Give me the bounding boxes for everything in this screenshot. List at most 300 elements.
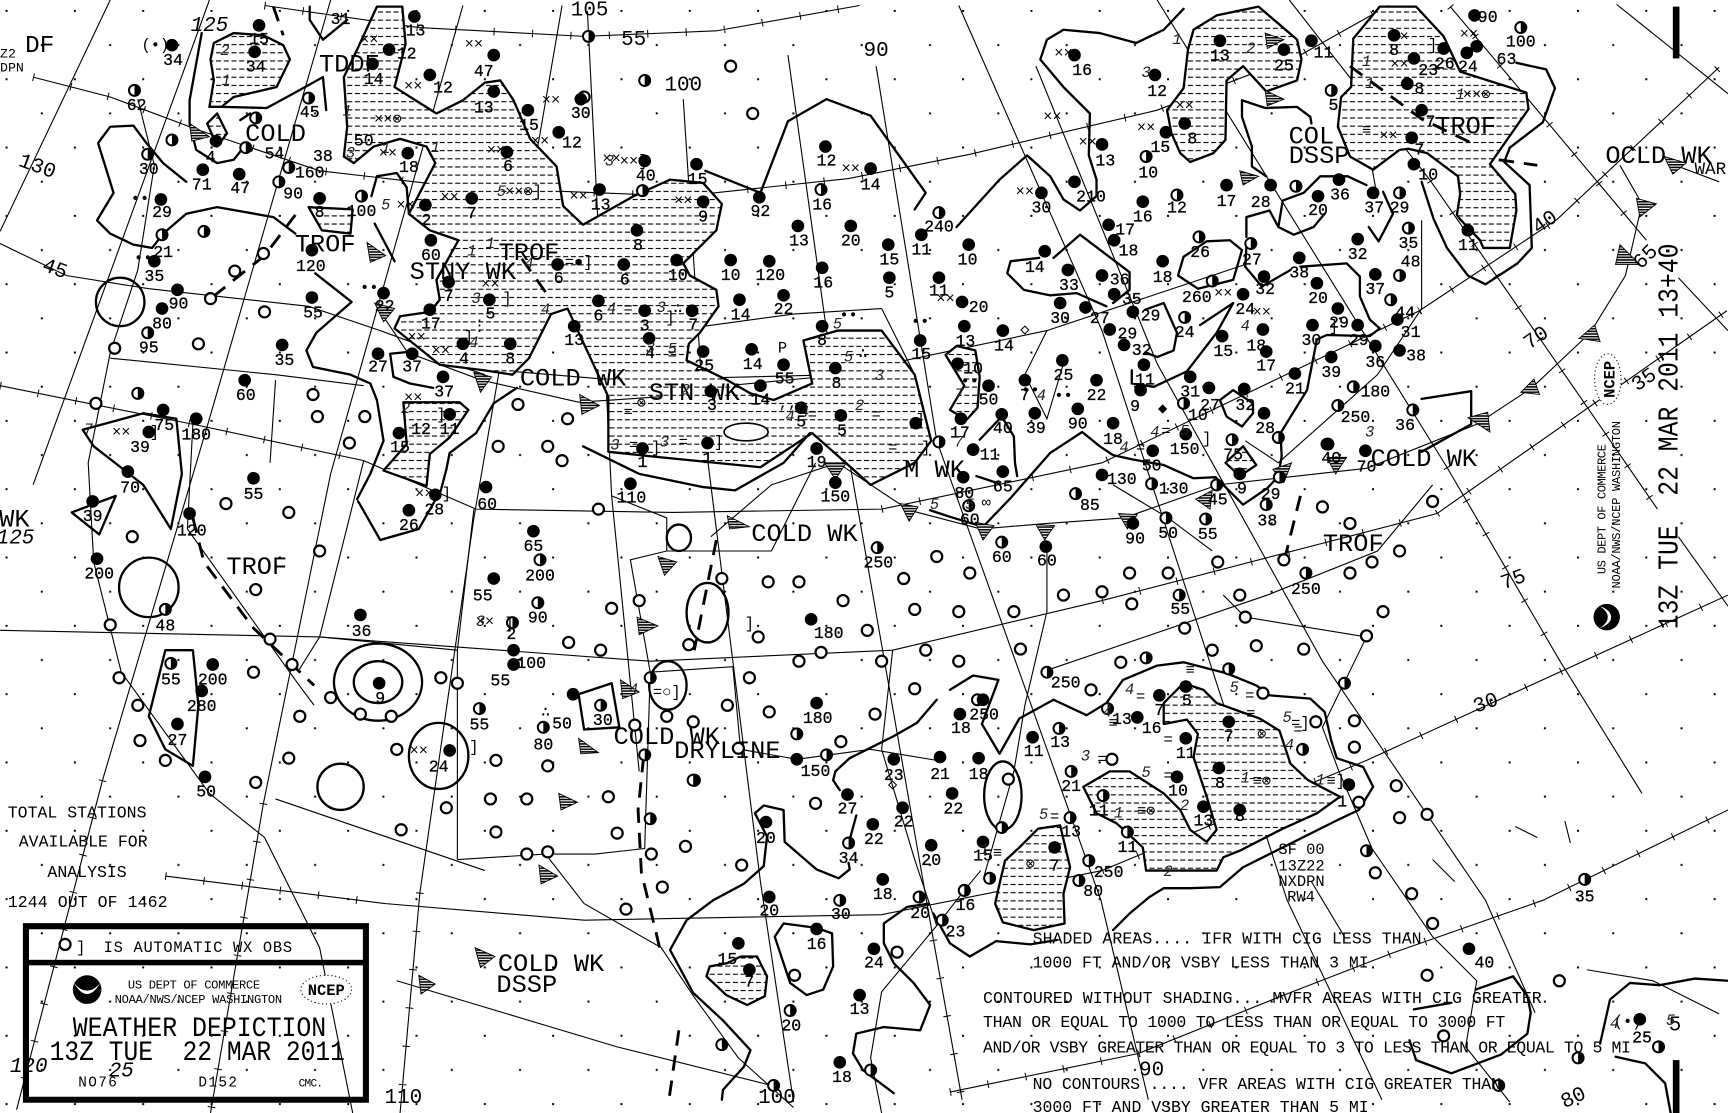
present weather and visibility symbols: ◇ xyxy=(888,776,898,794)
station values: 180 xyxy=(814,624,844,643)
present weather and visibility symbols: ×× xyxy=(1390,28,1409,46)
station values: 16 xyxy=(813,274,833,293)
station values: 50 xyxy=(1158,524,1178,543)
station values: 14 xyxy=(1025,258,1045,277)
present weather and visibility symbols: ≡ xyxy=(1246,705,1255,723)
station values: 25 xyxy=(694,356,714,375)
rotated NCEP badge: NCEP xyxy=(1601,361,1619,398)
product codes: NO76 xyxy=(78,1076,117,1092)
station values: 18 xyxy=(1103,430,1123,449)
prefixed visibility values: 4 xyxy=(541,301,550,319)
station values: 35 xyxy=(1398,234,1418,253)
station values: 47 xyxy=(230,179,250,198)
station values: 39 xyxy=(130,438,150,457)
station values: 7 xyxy=(467,204,477,223)
station values: 21 xyxy=(1061,777,1081,796)
chart identifiers: RW4 xyxy=(1287,888,1315,906)
station values: 160 xyxy=(295,163,325,182)
station values: 9 xyxy=(1237,480,1247,499)
prefixed visibility values: 5 xyxy=(1141,764,1151,782)
station values: 17 xyxy=(950,423,970,442)
station values: 15 xyxy=(879,250,899,269)
station values: 5 xyxy=(884,284,894,303)
present weather and visibility symbols: ] xyxy=(651,439,660,457)
prefixed visibility values: 4 xyxy=(1610,1015,1619,1033)
station values: 16 xyxy=(955,896,975,915)
station values: 10 xyxy=(1188,406,1208,425)
station values: 13 xyxy=(955,332,975,351)
IFR shaded areas xyxy=(207,7,1528,1005)
station values: 30 xyxy=(571,104,591,123)
agency lines: NOAA/NWS/NCEP WASHINGTON xyxy=(115,993,282,1007)
present weather and visibility symbols: ≡ xyxy=(993,844,1002,862)
title box xyxy=(26,926,366,1100)
grid value labels: 105 xyxy=(571,0,608,22)
station values: 16 xyxy=(1142,719,1162,738)
station values: 13 xyxy=(1050,733,1070,752)
station values: 10 xyxy=(668,266,688,285)
station values: 60 xyxy=(1037,551,1057,570)
present weather and visibility symbols: ××⊗ xyxy=(1463,86,1491,104)
present weather and visibility symbols: = xyxy=(1136,439,1145,457)
present weather and visibility symbols: =○] xyxy=(653,683,681,701)
present weather and visibility symbols: ≡ xyxy=(1186,661,1195,679)
station values: 6 xyxy=(620,270,630,289)
prefixed visibility values: 7 xyxy=(954,386,964,404)
station values: 20 xyxy=(1308,289,1328,308)
prefixed visibility values: 1 xyxy=(486,235,495,253)
present weather and visibility symbols: ×× xyxy=(487,141,505,159)
prefixed visibility values: 4 xyxy=(1037,387,1046,405)
station values: 14 xyxy=(994,336,1014,355)
present weather and visibility symbols: ×× xyxy=(440,189,459,207)
product codes: CMC. xyxy=(299,1079,323,1091)
station values: 54 xyxy=(265,145,284,164)
present weather and visibility symbols: ××⊗] xyxy=(505,183,542,201)
station values: 47 xyxy=(474,62,494,81)
station values: 150 xyxy=(801,762,830,781)
present weather and visibility symbols: ] xyxy=(505,615,514,633)
station values: 36 xyxy=(352,622,371,641)
prefixed visibility values: 5 xyxy=(965,496,974,514)
station values: 16 xyxy=(1072,61,1092,80)
station values: 30 xyxy=(831,905,851,924)
station values: 65 xyxy=(523,537,543,556)
chart identifiers: Z2 xyxy=(0,46,16,61)
prefixed visibility values: 1 xyxy=(1241,769,1250,787)
present weather and visibility symbols: ,, xyxy=(779,395,797,413)
station values: 32 xyxy=(1235,396,1255,415)
station values: 250 xyxy=(1051,674,1081,693)
prefixed visibility values: 1 xyxy=(1456,86,1465,104)
prefixed visibility values: 3 xyxy=(476,613,485,631)
present weather and visibility symbols: = xyxy=(1294,721,1303,739)
present weather and visibility symbols: ×× xyxy=(1253,303,1271,321)
station values: 45 xyxy=(1208,491,1228,510)
station values: 15 xyxy=(1151,138,1170,157)
station values: 95 xyxy=(139,339,159,358)
station values: 8 xyxy=(817,331,827,350)
agency lines: US DEPT OF COMMERCE xyxy=(128,978,260,992)
station values: 7 xyxy=(1020,386,1030,405)
station values: 13 xyxy=(1112,710,1132,729)
station values: 12 xyxy=(562,134,582,153)
station values: 26 xyxy=(1190,243,1210,262)
station values: 130 xyxy=(1107,470,1137,489)
prefixed visibility values: 4 xyxy=(800,404,809,422)
station values: 27 xyxy=(1090,309,1110,328)
present weather and visibility symbols: •• xyxy=(360,279,378,297)
station values: 8 xyxy=(315,203,325,222)
present weather and visibility symbols: ×× xyxy=(432,342,450,360)
station values: 90 xyxy=(528,609,548,628)
station values: 2 xyxy=(506,625,516,644)
grid value labels: 90 xyxy=(1139,1060,1164,1083)
station values: 7 xyxy=(688,315,698,334)
station values: 55 xyxy=(473,587,493,606)
station values: 7 xyxy=(1154,701,1164,720)
legend: area definitions: NO CONTOURS .... VFR AREAS WITH CIG GREATER THAN xyxy=(1033,1075,1501,1094)
present weather and visibility symbols: ] xyxy=(469,739,479,757)
present weather and visibility symbols xyxy=(112,26,1642,1031)
prefixed visibility values: 2 xyxy=(681,382,690,400)
station values: 39 xyxy=(1026,419,1046,438)
station values: 260 xyxy=(1182,288,1212,307)
present weather and visibility symbols: ] xyxy=(714,433,723,451)
icon: NOAA logo xyxy=(73,975,101,1004)
station values: 20 xyxy=(921,851,941,870)
prefixed visibility values: 4 xyxy=(524,255,534,273)
station values: 15 xyxy=(717,950,737,969)
station values: 55 xyxy=(1170,600,1190,619)
station values: 80 xyxy=(533,735,553,754)
station values: 8 xyxy=(1414,80,1424,99)
icon: rotated NOAA logo xyxy=(1594,604,1620,630)
station values: 10 xyxy=(963,360,983,379)
station values: 55 xyxy=(1198,525,1218,544)
station values: 55 xyxy=(490,671,510,690)
present weather and visibility symbols: ×× xyxy=(112,423,131,441)
prefixed visibility values: 4 xyxy=(1150,423,1160,441)
station values: 12 xyxy=(817,151,836,170)
station values: 180 xyxy=(1360,383,1390,402)
station values: 11 xyxy=(1314,43,1334,62)
present weather and visibility symbols: ⋮ xyxy=(472,318,487,336)
station values: 2 xyxy=(422,211,431,230)
prefixed visibility values: 1 xyxy=(1362,53,1371,71)
station values: 12 xyxy=(433,79,453,98)
station values: 30 xyxy=(593,711,613,730)
front and trough labels: TROF xyxy=(499,239,559,268)
station values: 15 xyxy=(688,170,708,189)
front and trough labels: COLD WK xyxy=(1371,445,1478,474)
station values: 85 xyxy=(1080,496,1100,515)
present weather and visibility symbols: ×× xyxy=(396,196,415,214)
station values: 250 xyxy=(1341,408,1370,427)
station values: 21 xyxy=(153,243,173,262)
front and trough labels: DSSP xyxy=(496,971,557,1000)
station values: 37 xyxy=(1364,199,1384,218)
station values: 71 xyxy=(192,176,212,195)
station values: 65 xyxy=(993,477,1013,496)
station values: 50 xyxy=(1142,457,1162,476)
station values: 50 xyxy=(354,131,374,150)
grid value labels: 110 xyxy=(385,1087,422,1110)
present weather and visibility symbols: = xyxy=(629,437,638,455)
prefixed visibility values: 7 xyxy=(954,433,964,451)
present weather and visibility symbols: •• xyxy=(911,313,929,331)
station values: 11 xyxy=(980,446,1000,465)
station values: 1 xyxy=(703,449,713,468)
present weather and visibility symbols: ×× xyxy=(1078,134,1097,152)
station values: 35 xyxy=(1122,290,1142,309)
station values: 180 xyxy=(803,709,833,728)
title box: IS AUTOMATIC WX OBS xyxy=(104,939,292,957)
station values: 7 xyxy=(1414,140,1424,159)
grid value labels: 30 xyxy=(1470,689,1502,719)
station values: 90 xyxy=(1478,8,1498,27)
front and trough labels: TROF xyxy=(226,553,287,582)
station values: 210 xyxy=(1076,188,1106,207)
present weather and visibility symbols: = xyxy=(624,300,633,318)
station values: 11 xyxy=(1089,801,1109,820)
station values: 55 xyxy=(303,303,323,322)
station values: 92 xyxy=(750,202,770,221)
present weather and visibility symbols: ] xyxy=(150,423,159,441)
station values: 120 xyxy=(177,522,207,541)
station values: 7 xyxy=(1050,857,1060,876)
station values: 8 xyxy=(633,236,643,255)
chart identifiers: NXDPN xyxy=(1278,873,1325,891)
grid value labels: 65 xyxy=(1630,241,1664,275)
station values: 5 xyxy=(837,421,847,440)
station values: 60 xyxy=(992,548,1012,567)
station values: 8 xyxy=(505,350,515,369)
station values: 29 xyxy=(1117,324,1137,343)
station values: 32 xyxy=(1255,280,1275,299)
station values: 30 xyxy=(1301,331,1321,350)
grid value labels: 5 xyxy=(1669,1014,1681,1037)
station values: 7 xyxy=(744,972,754,991)
station values: 10 xyxy=(1138,163,1158,182)
present weather and visibility symbols: (•) xyxy=(1614,1013,1642,1031)
present weather and visibility symbols: ◆ xyxy=(1158,400,1168,418)
rotated agency lines: US DEPT OF COMMERCE xyxy=(1596,444,1610,574)
prefixed visibility values: 1 xyxy=(221,72,231,90)
station values: 100 xyxy=(516,654,546,673)
prefixed visibility values: 5 xyxy=(1039,806,1048,824)
prefixed visibility values: 5 xyxy=(930,496,939,514)
prefixed visibility values: 3 xyxy=(605,152,614,170)
station values: 11 xyxy=(1024,742,1044,761)
station values: 12 xyxy=(1147,82,1167,101)
station values: 250 xyxy=(969,706,999,725)
legend: area definitions: SHADED AREAS.... IFR WITH CIG LESS THAN xyxy=(1033,929,1422,948)
station values: 14 xyxy=(743,355,763,374)
prefixed visibility values: 1 xyxy=(431,139,440,157)
prefixed visibility values: 5 xyxy=(833,315,842,333)
station values: 14 xyxy=(364,70,384,89)
present weather and visibility symbols: ×× xyxy=(360,31,378,49)
station values: 5 xyxy=(1328,96,1338,115)
station values: 130 xyxy=(1159,480,1189,499)
station values: 180 xyxy=(181,426,211,445)
station values: 26 xyxy=(399,516,419,535)
station values: 70 xyxy=(120,479,140,498)
present weather and visibility symbols: ×× xyxy=(415,485,434,503)
prefixed visibility values: 3 xyxy=(657,299,666,317)
station values: 29 xyxy=(1390,199,1409,218)
present weather and visibility symbols: ×× xyxy=(1043,108,1062,126)
front triangles xyxy=(190,33,1686,994)
station values: 12 xyxy=(1167,199,1187,218)
station values: 15 xyxy=(249,30,269,49)
present weather and visibility symbols: ≡] xyxy=(1326,773,1345,791)
station values: 33 xyxy=(1059,276,1079,295)
station values: 15 xyxy=(390,438,410,457)
station values: 36 xyxy=(1365,353,1385,372)
NCEP badge: NCEP xyxy=(308,982,345,1000)
station values: 1 xyxy=(638,453,648,472)
prefixed visibility values: 3 xyxy=(875,367,884,385)
present weather and visibility symbols: ⊗ xyxy=(1026,855,1035,873)
station values: 48 xyxy=(1401,253,1420,272)
station values: 80 xyxy=(152,314,172,333)
station values: 200 xyxy=(525,567,555,586)
present weather and visibility symbols: ×× xyxy=(1214,285,1232,303)
station values: 36 xyxy=(1110,270,1130,289)
front and trough labels: COLD WK xyxy=(498,950,605,979)
front and trough labels: M WK xyxy=(904,456,966,485)
present weather and visibility symbols: •• xyxy=(134,249,153,267)
station values: 13 xyxy=(474,98,494,117)
station values: 4 xyxy=(206,148,216,167)
present weather and visibility symbols: ×× xyxy=(404,77,423,95)
station values: 5 xyxy=(1182,691,1192,710)
prefixed visibility values: 2 xyxy=(1246,40,1255,58)
prefixed visibility values: 5 xyxy=(668,341,677,359)
prefixed visibility values: 3 xyxy=(1081,747,1090,765)
prefixed visibility values: 1 xyxy=(1114,805,1123,823)
prefixed visibility values: 3 xyxy=(1141,64,1151,82)
prefixed visibility values: 2 xyxy=(1164,863,1173,881)
station values: 21 xyxy=(1285,379,1305,398)
front and trough labels: STN WK xyxy=(649,379,741,408)
legend: area definitions: AND/OR VSBY GREATER THAN OR EQUAL TO 3 TO LESS THAN OR EQUAL TO 5 MI xyxy=(983,1038,1631,1057)
present weather and visibility symbols: ∞ xyxy=(982,494,991,512)
present weather and visibility symbols: ×× xyxy=(531,132,549,150)
station values: 60 xyxy=(960,511,980,530)
station values: 38 xyxy=(1289,264,1309,283)
prefixed visibility values: 7 xyxy=(84,421,94,439)
present weather and visibility symbols: ] xyxy=(436,406,445,424)
prefixed visibility values: 4 xyxy=(469,334,479,352)
prefixed visibility values: 1 xyxy=(381,140,390,158)
prefixed visibility values: 1 xyxy=(1172,31,1182,49)
station values: 10 xyxy=(1418,166,1438,185)
station values: 16 xyxy=(807,935,827,954)
station values: 34 xyxy=(839,849,859,868)
present weather and visibility symbols: = xyxy=(668,346,677,364)
front and trough labels: COLD WK xyxy=(751,520,858,549)
station values: 11 xyxy=(1458,236,1478,255)
present weather and visibility symbols: = xyxy=(808,406,817,424)
present weather and visibility symbols: ×× xyxy=(1460,26,1478,44)
present weather and visibility symbols: ≡ xyxy=(1108,714,1118,732)
prefixed visibility values: 5 xyxy=(1283,709,1292,727)
station values: 26 xyxy=(1435,54,1455,73)
station values: 18 xyxy=(1119,242,1138,261)
station values: 18 xyxy=(1153,268,1173,287)
station values: 200 xyxy=(84,565,114,584)
prefixed visibility values: 2 xyxy=(1180,797,1189,815)
station values: 4 xyxy=(459,350,469,369)
station values: 25 xyxy=(1274,57,1294,76)
present weather and visibility symbols: ≡ xyxy=(1362,121,1371,139)
station values: 17 xyxy=(1217,192,1236,211)
rotated agency lines: NOAA/NWS/NCEP WASHINGTON xyxy=(1610,421,1624,588)
present weather and visibility symbols: ⊗ xyxy=(1257,725,1266,743)
front and trough labels: STNY WK xyxy=(410,258,517,287)
station values: 11 xyxy=(911,241,931,260)
present weather and visibility symbols: ] xyxy=(1329,318,1338,336)
present weather and visibility symbols: ××] xyxy=(620,152,648,170)
present weather and visibility symbols: ×× xyxy=(407,329,426,347)
present weather and visibility symbols: = xyxy=(1245,687,1254,705)
present weather and visibility symbols: ×× xyxy=(1390,55,1409,73)
frontal lines xyxy=(190,33,1719,994)
station values: 50 xyxy=(552,714,572,733)
station values: 11 xyxy=(1117,838,1137,857)
present weather and visibility symbols: ×× xyxy=(1054,44,1073,62)
station values: 27 xyxy=(1200,396,1220,415)
prefixed visibility values: 3 xyxy=(660,433,669,451)
grid value labels: 130 xyxy=(15,150,58,185)
grid value labels: 25 xyxy=(109,1061,134,1084)
present weather and visibility symbols: ×× xyxy=(465,35,483,53)
present weather and visibility symbols: ] xyxy=(665,309,675,327)
present weather and visibility symbols: ] xyxy=(921,439,930,457)
station values: 250 xyxy=(1291,580,1321,599)
station values: 15 xyxy=(973,847,993,866)
station values: 37 xyxy=(1365,280,1385,299)
station values: 110 xyxy=(617,489,646,508)
station values: 22 xyxy=(864,830,884,849)
station values: 75 xyxy=(1223,446,1243,465)
grid value labels: 100 xyxy=(758,1087,796,1110)
station values: 35 xyxy=(274,351,294,370)
station values: 18 xyxy=(399,158,419,177)
station values: 62 xyxy=(127,96,147,115)
prefixed visibility values: 1 xyxy=(343,103,352,121)
front and trough labels: DRYLINE xyxy=(674,737,781,766)
present weather and visibility symbols: ××⊗ xyxy=(374,110,402,128)
present weather and visibility symbols: ∴ xyxy=(541,703,550,721)
station values: 240 xyxy=(924,217,954,236)
prefixed visibility values: 4 xyxy=(1241,318,1250,336)
station values: 20 xyxy=(756,829,776,848)
station values: 13 xyxy=(1061,822,1081,841)
present weather and visibility symbols: •• xyxy=(961,373,979,391)
station values: 20 xyxy=(1308,201,1328,220)
station values: 8 xyxy=(831,374,841,393)
station values: 11 xyxy=(1176,744,1196,763)
station values: 29 xyxy=(1141,307,1160,326)
station values: 90 xyxy=(169,295,188,314)
station values: 22 xyxy=(774,300,793,319)
station values: 32 xyxy=(1348,245,1368,264)
station values: 280 xyxy=(187,697,217,716)
